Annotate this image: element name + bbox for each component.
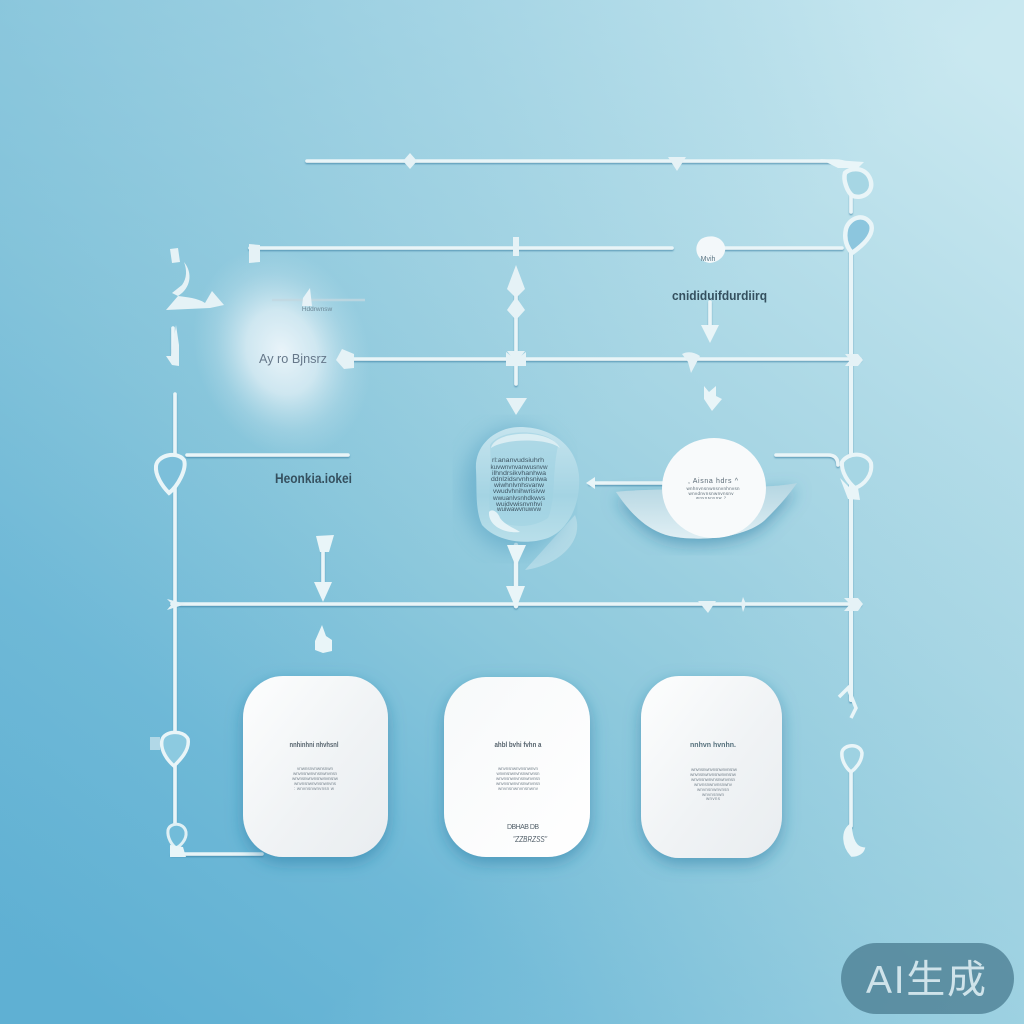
icon: teardrop with label: Mvih	[701, 256, 715, 263]
text block: card three body: wnvnsnwnvnsnwnvnsnw	[691, 767, 738, 772]
icon: right arrow down	[701, 325, 719, 343]
icon: fourth line nodes	[167, 597, 863, 613]
icon: third line nodes	[506, 352, 863, 373]
text block: circle callout text: wnvnsnvnw ?	[696, 495, 727, 500]
text block: glass bubble text: ddnlzidsrvnhsniwa	[491, 476, 547, 483]
heading: glow label: Ay ro Bjnsrz	[259, 352, 327, 366]
arrow: callout to bubble	[586, 477, 595, 489]
heading: card two title: ahbl bvhi fvhn a	[494, 740, 542, 749]
heading: card one title: nnhinhni nhvhsnl	[290, 740, 338, 749]
panel: glass bubble	[463, 427, 579, 570]
text block: card two body: wnvnsnwnvnsnwnvnsn	[496, 776, 540, 781]
text block: glass bubble text: vwudvhnihwrisivw	[493, 488, 545, 495]
icon: lower right ornaments	[839, 688, 863, 855]
icon: lower left ring nodes	[150, 732, 188, 857]
heading: right label: cnididuifdurdiirq	[672, 289, 767, 303]
text block: card one body: wnvnsnwnvnsnwnvnsnw	[292, 776, 339, 781]
icon: top line marker	[403, 153, 686, 171]
text block: card three body: wnvnsnwnvnsnwnv	[694, 782, 733, 787]
panel: card three	[641, 676, 782, 858]
icon: arrow below third line	[704, 386, 722, 411]
text block: card two footer: DBHAB DB	[507, 824, 539, 831]
text block: glass bubble text: wwuanlvsnhdkwvs	[492, 495, 546, 502]
connector frame lines	[172, 161, 860, 854]
icon: left ring node	[156, 455, 185, 493]
text block: circle callout text: wnhnvnsnwnsnvnhnvsn	[686, 486, 740, 491]
icon: left arrow and flame	[314, 535, 334, 653]
text block: glass bubble text	[490, 457, 548, 513]
text block: glass bubble text: kuvwnvnvanwusnvw	[490, 464, 548, 471]
text block: glass bubble text: ilhndrsikvhanhwa	[492, 470, 546, 477]
text block: card one body: : wnvnsnwnvnsn w	[294, 786, 335, 791]
badge: AI generated: AI生成	[866, 959, 986, 1002]
icon: second line start marker	[249, 244, 260, 263]
heading: left label: Heonkia.iokei	[275, 471, 352, 486]
text block: circle callout text: , Aisna hdrs ^	[688, 478, 739, 485]
text block: card two body: wnvnsnwnvnsnwnv	[498, 786, 539, 791]
icon: top right node rings	[820, 159, 872, 253]
icon: arrows below bubble	[506, 545, 526, 609]
text block: glass bubble text: wuidvwisnvnhvi	[495, 501, 542, 508]
text block: glass bubble text: rl:ananvudsiuhrh	[492, 457, 544, 464]
glow highlight	[164, 221, 400, 483]
text block: glass bubble text: wiwhnlvnhsvanw	[493, 482, 544, 489]
icon: left arrow with caption: Hddrwnsw	[302, 306, 332, 313]
text block: card three body: wnvnsnwnvnsnwnvnsn	[691, 777, 735, 782]
text block: circle callout text	[686, 478, 740, 500]
icon: left arrow with caption	[272, 288, 365, 313]
text block: card two footer	[507, 824, 548, 844]
text block: card one body: wnvnsnwnvnsnwnvns	[294, 781, 337, 786]
icon: left fragments	[166, 248, 224, 366]
text block: glass bubble text: wuiwawvnuwvw	[496, 506, 541, 513]
text block: card two body	[496, 766, 540, 791]
icon: teardrop with label	[696, 236, 725, 263]
text block: card two body: wnvnsnwnvnsnwnvn	[498, 766, 538, 771]
text block: card one body: wnvnsnwnvnsnwnvnsn	[293, 771, 337, 776]
badge: AI generated	[841, 943, 1014, 1014]
text block: card three body: wnvnsnwnvnsnwnvnsnw	[690, 772, 737, 777]
panel: card two	[444, 677, 590, 857]
icon: center column arrows	[506, 237, 527, 415]
text block: circle callout text: wnvdnvnsnwnvnsnv	[688, 491, 734, 496]
text block: card two footer: "ZZBRZSS"	[513, 835, 548, 844]
panel: circle callout	[616, 438, 797, 539]
text block: card three body: wnvns	[706, 796, 721, 801]
heading: card three title: nnhvn hvnhn.	[690, 740, 736, 749]
icon: right ring node	[840, 455, 871, 500]
text block: card three body: wnvnsnwnvnsn	[697, 787, 729, 792]
text block: card three body: wnvnsnwn	[702, 792, 724, 797]
text block: card one body: vnwnsnvnwnsnwn	[297, 766, 333, 771]
text block: card one body	[292, 766, 339, 791]
text block: card two body: wnvnsnwnvnsnwnvnsn	[496, 781, 540, 786]
icon: glow line marker	[336, 349, 354, 369]
text block: card two body: wnvnsnwnvnsnwnvnsn	[496, 771, 540, 776]
panel: card one	[243, 676, 388, 857]
text block: card three body	[690, 767, 738, 801]
